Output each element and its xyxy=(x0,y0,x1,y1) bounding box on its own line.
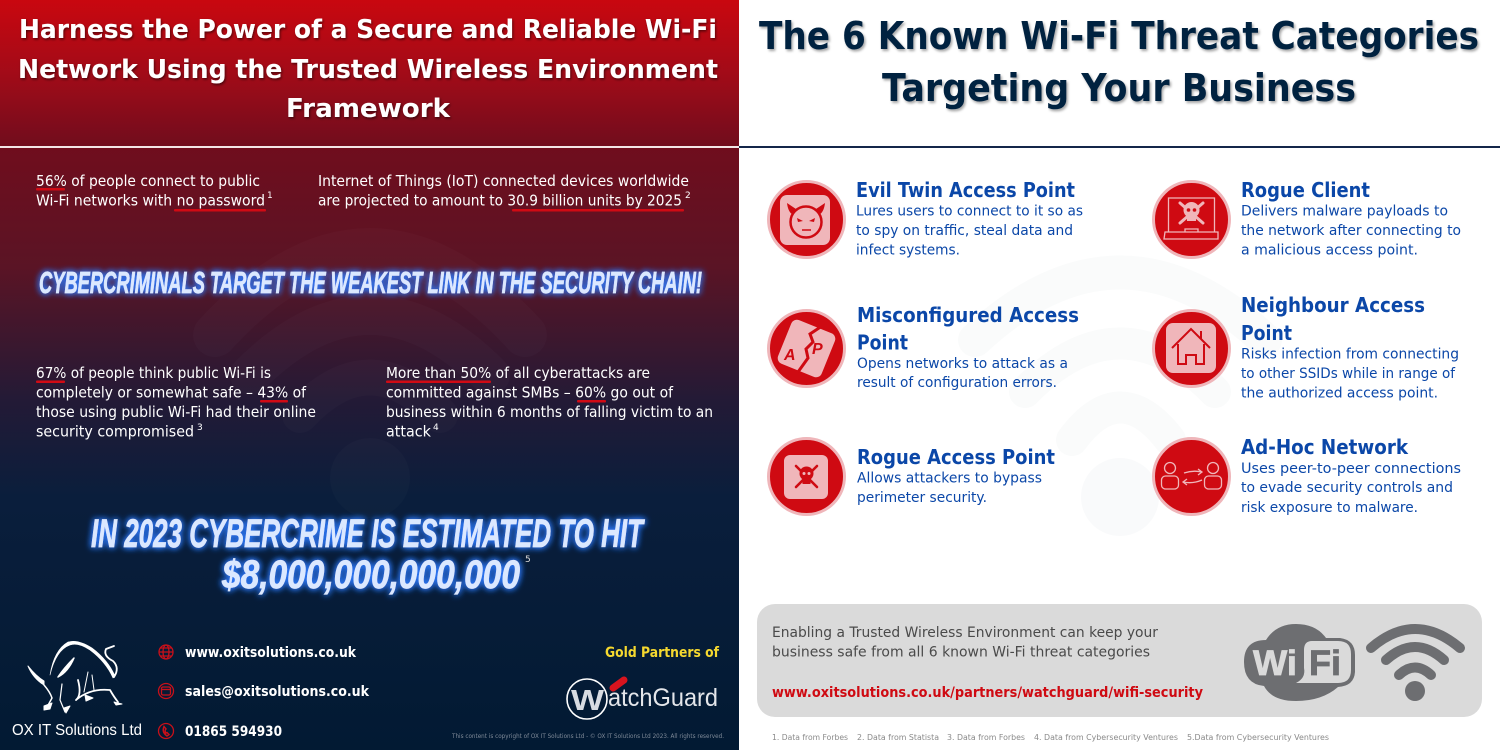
panel: left background xyxy=(0,0,739,750)
threat: Neighbour Access Point: Neighbour Access xyxy=(1241,293,1425,317)
text block: public Wi-Fi statistic: 1 xyxy=(267,191,273,201)
text block: public Wi-Fi statistic: Wi-Fi networks with no password xyxy=(36,192,265,210)
threat: Rogue Access Point: Rogue Access Point xyxy=(857,445,1055,469)
heading: right title xyxy=(759,14,1479,110)
text block: IoT statistic: are projected to amount to 30.9 billion units by 2025 xyxy=(318,192,682,210)
text block: public Wi-Fi statistic xyxy=(36,172,273,212)
icon: Wi-Fi signal xyxy=(1371,629,1460,701)
icon: phone xyxy=(158,724,174,738)
text block: public Wi-Fi safety statistic: completely or somewhat safe – 43% of xyxy=(36,384,307,402)
threat: Misconfigured Access Point: Misconfigured Access xyxy=(857,303,1079,327)
threat: Ad-Hoc Network xyxy=(1154,435,1461,516)
heading: left title: Network Using the Trusted Wireless Environment xyxy=(18,55,718,85)
text: sources: 4. Data from Cybersecurity Ventures xyxy=(1034,733,1178,742)
text block: public Wi-Fi safety statistic xyxy=(36,364,316,440)
threat: Rogue Access Point xyxy=(768,438,1055,514)
text: sources xyxy=(772,733,1329,742)
text block: public Wi-Fi safety statistic: security compromised xyxy=(36,422,194,440)
heading: left title: Harness the Power of a Secure and Reliable Wi-Fi xyxy=(19,15,717,45)
callout: cybercrime cost headline: IN 2023 CYBERCRIME IS ESTIMATED TO HIT xyxy=(91,512,645,556)
icon: skull tile xyxy=(768,438,844,514)
text block: SMB statistic: committed against SMBs – 60% go out of xyxy=(386,384,674,402)
text block: SMB statistic: More than 50% of all cyberattacks are xyxy=(386,364,650,382)
icon: WatchGuard logo: W xyxy=(571,685,605,717)
heading: left title xyxy=(18,15,718,124)
threat: Neighbour Access Point: Point xyxy=(1241,321,1292,345)
threat: Misconfigured Access Point: Opens networks to attack as a xyxy=(857,356,1068,372)
threat: Rogue Client: a malicious access point. xyxy=(1241,242,1418,258)
text block: SMB statistic: business within 6 months of falling victim to an xyxy=(386,403,713,421)
icon: Wi-Fi badge: Wi xyxy=(1253,644,1297,683)
text block: SMB statistic: attack xyxy=(386,422,431,440)
threat: Misconfigured Access Point: Point xyxy=(857,330,908,354)
threat: Rogue Client xyxy=(1154,178,1461,258)
text block: IoT statistic: 2 xyxy=(685,191,691,201)
text: email: sales@oxitsolutions.co.uk xyxy=(185,684,369,700)
threat: Rogue Access Point: perimeter security. xyxy=(857,490,987,506)
text: copyright: This content is copyright of OX IT Solutions Ltd - © OX IT Solutions Ltd 2023. All rights reserved. xyxy=(451,732,724,740)
text block: public Wi-Fi statistic: 56% of people connect to public xyxy=(36,172,260,190)
threat: Rogue Client: the network after connecting to xyxy=(1241,223,1461,239)
icon: infected laptop xyxy=(1154,182,1230,258)
text: call to action copy: business safe from all 6 known Wi-Fi threat categories xyxy=(772,644,1150,660)
threat: Neighbour Access Point: Risks infection from connecting xyxy=(1241,346,1459,362)
threat: Misconfigured Access Point xyxy=(768,303,1079,391)
text: company name: OX IT Solutions Ltd xyxy=(12,722,142,739)
callout: cybercrime cost headline: 5 xyxy=(525,555,531,565)
text block: IoT statistic xyxy=(318,172,691,212)
threat: Evil Twin Access Point: Lures users to connect to it so as xyxy=(856,204,1083,220)
text: website: www.oxitsolutions.co.uk xyxy=(185,645,356,661)
threat: Evil Twin Access Point: Evil Twin Access Point xyxy=(856,178,1075,202)
icon: broken AP tile: P xyxy=(812,341,823,358)
icon: mail xyxy=(158,684,174,698)
callout: cybercrime cost headline: $8,000,000,000,000 xyxy=(221,553,520,597)
threat: Rogue Client: Delivers malware payloads to xyxy=(1241,204,1448,220)
icon: broken AP tile: A xyxy=(783,347,796,364)
text block: SMB statistic xyxy=(386,364,713,440)
threat: Rogue Client: Rogue Client xyxy=(1241,178,1370,202)
text block: IoT statistic: Internet of Things (IoT) connected devices worldwide xyxy=(318,172,689,190)
threat: Neighbour Access Point xyxy=(1154,293,1459,402)
icon: devil xyxy=(768,182,844,258)
text: sources: 5.Data from Cybersecurity Ventures xyxy=(1187,733,1329,742)
text: link: www.oxitsolutions.co.uk/partners/watchguard/wifi-security xyxy=(772,685,1203,701)
callout: weakest link headline: CYBERCRIMINALS TARGET THE WEAKEST LINK IN THE SECURITY CHAIN! xyxy=(39,265,702,300)
text block: public Wi-Fi safety statistic: those using public Wi-Fi had their online xyxy=(36,403,316,421)
threat: Ad-Hoc Network: Uses peer-to-peer connections xyxy=(1241,461,1461,477)
panel: right background xyxy=(739,0,1500,750)
icon: OX IT bull logo xyxy=(28,641,122,713)
text block: public Wi-Fi safety statistic: 67% of people think public Wi-Fi is xyxy=(36,364,271,382)
icon: Wi-Fi badge: Fi xyxy=(1309,644,1341,683)
text: call to action copy: Enabling a Trusted Wireless Environment can keep your xyxy=(772,625,1158,641)
text: gold partners: Gold Partners of xyxy=(605,645,720,661)
text: phone number: 01865 594930 xyxy=(185,724,282,740)
text: sources: 1. Data from Forbes xyxy=(772,733,848,742)
threat: Rogue Access Point: Allows attackers to bypass xyxy=(857,470,1042,486)
text: call to action copy xyxy=(772,625,1158,660)
icon: peer-to-peer users xyxy=(1154,438,1230,514)
threat: Evil Twin Access Point xyxy=(768,178,1083,258)
icon: broken AP tile xyxy=(768,310,844,386)
heading: left title: Framework xyxy=(286,94,451,124)
threat: Ad-Hoc Network: risk exposure to malware. xyxy=(1241,500,1418,516)
threat: Neighbour Access Point: the authorized access point. xyxy=(1241,386,1438,402)
icon: WatchGuard logo xyxy=(567,679,718,719)
icon: Wi-Fi badge xyxy=(1244,624,1355,701)
icon: right wifi watermark xyxy=(975,272,1265,536)
callout: cybercrime cost headline xyxy=(91,512,645,597)
icon: left wifi watermark xyxy=(215,250,525,518)
threat: Misconfigured Access Point: result of configuration errors. xyxy=(857,375,1057,391)
threat: Neighbour Access Point: to other SSIDs while in range of xyxy=(1241,366,1456,382)
icon: house xyxy=(1154,310,1230,386)
text: sources: 2. Data from Statista xyxy=(857,733,939,742)
icon: WatchGuard logo: atchGuard xyxy=(608,684,718,712)
text block: public Wi-Fi safety statistic: 3 xyxy=(197,423,203,433)
threat: Ad-Hoc Network: Ad-Hoc Network xyxy=(1241,435,1409,459)
panel: trusted wireless call to action xyxy=(757,604,1482,717)
threat: Evil Twin Access Point: to spy on traffic, steal data and xyxy=(856,223,1073,239)
icon: globe xyxy=(159,645,173,659)
text block: SMB statistic: 4 xyxy=(433,423,439,433)
heading: right title: Targeting Your Business xyxy=(882,66,1356,110)
threat: Ad-Hoc Network: to evade security controls and xyxy=(1241,480,1453,496)
text: sources: 3. Data from Forbes xyxy=(947,733,1025,742)
threat: Evil Twin Access Point: infect systems. xyxy=(856,242,960,258)
